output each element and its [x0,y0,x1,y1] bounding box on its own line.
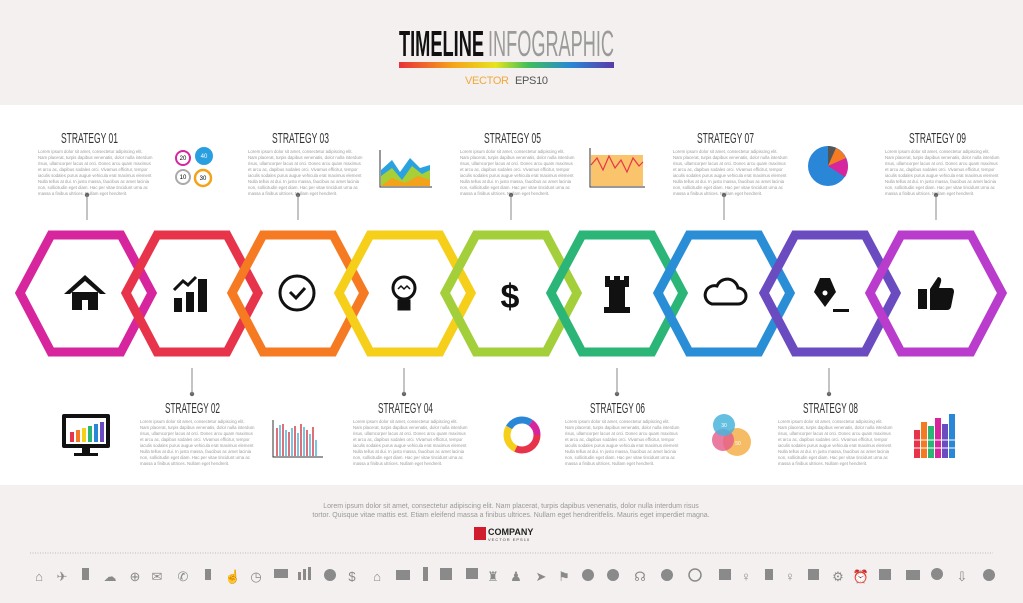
footer icon row: ⚑ [558,569,570,584]
hexagon chain [20,235,1002,352]
title: EPS10 [515,75,548,87]
icon: bulb [393,277,415,309]
strategy 05: STRATEGY 05 [484,130,541,147]
chart: venn: 50 [735,441,741,447]
chart: pie [808,146,848,186]
chart: venn: 30 [721,423,727,429]
strategy 01 [38,130,153,220]
footer icon row: ⇩ [957,569,967,584]
chart: circles: 10 [180,175,187,181]
strategy 08: STRATEGY 08 [803,400,858,417]
footer icon row: ☁ [104,569,116,584]
company logo [474,527,533,542]
strategy 07 [673,130,788,220]
footer icon row: ♀ [785,569,795,584]
company logo: VECTOR EPS10 [488,537,530,542]
footer icon row: ⏰ [853,568,869,584]
strategy 03 [248,130,363,220]
chart: bar line [590,148,645,187]
strategy 09: STRATEGY 09 [909,130,966,147]
footer icon row: ♜ [487,569,499,584]
strategy 04: STRATEGY 04 [378,400,433,417]
chart: area [380,150,432,187]
icon: monitor [62,414,110,456]
strategy 02: STRATEGY 02 [165,400,220,417]
strategy 08 [778,368,893,466]
footer icon row: ☝ [225,568,241,585]
strategy 06: STRATEGY 06 [590,400,645,417]
icon: clock [280,276,314,310]
chart: donut [507,420,537,450]
footer icon row: ✉ [152,569,163,584]
white band [0,105,1023,485]
title: VECTOR [465,75,509,87]
chart: circles: 30 [200,176,207,182]
footer icon row: ➤ [536,569,547,584]
title: TIMELINE [399,23,484,64]
strategy 04 [353,368,468,466]
chart: equalizer [914,414,955,458]
chart: circles [176,147,213,186]
title: INFOGRAPHIC [488,23,614,64]
footer icon row: ⚙ [832,569,844,584]
strategy 03: STRATEGY 03 [272,130,329,147]
footer icon row: ☊ [634,569,646,584]
footer icon row: $ [348,569,356,584]
footer icon row: ◷ [250,569,262,584]
strategy 06 [565,368,680,466]
footer icon row: ✈ [57,569,68,584]
footer icon row: ⌂ [373,569,381,584]
company logo: COMPANY [488,527,533,537]
icon: thumbs up [918,277,954,310]
footer text: Lorem ipsum dolor sit amet, consectetur adipiscing elit. Nam placerat, turpis dapibus venenatis, dolor nulla interdum risus [323,503,699,510]
chart: circles: 40 [201,154,208,160]
strategy 05 [460,130,575,220]
chart: venn [712,414,751,456]
footer icon row: ⊕ [130,569,140,584]
icon: pen nib [814,278,849,312]
strategy 02 [140,368,255,466]
footer icon row: ♟ [510,569,522,584]
icon: cloud [705,279,746,304]
icon: dollar: $ [501,278,520,316]
footer text: tortor. Quisque vitae mattis est. Etiam eleifend massa a finibus ultrices. Nullam eget hendreritfelis. Mauris eget imperdiet magna. [312,512,710,519]
icon: house [64,275,106,310]
footer icon row: ✆ [178,569,189,584]
strategy 01: STRATEGY 01 [61,130,118,147]
title [399,23,614,87]
footer text [312,503,710,519]
icon: growth bars [174,277,207,312]
footer icon row [35,567,995,585]
icon: rook [604,276,630,313]
chart: circles: 20 [180,156,187,162]
strategy 09 [885,130,1000,220]
footer icon row: ♀ [741,569,751,584]
strategy 07: STRATEGY 07 [697,130,754,147]
chart: bars [273,420,323,457]
footer icon row: ⌂ [35,569,43,584]
